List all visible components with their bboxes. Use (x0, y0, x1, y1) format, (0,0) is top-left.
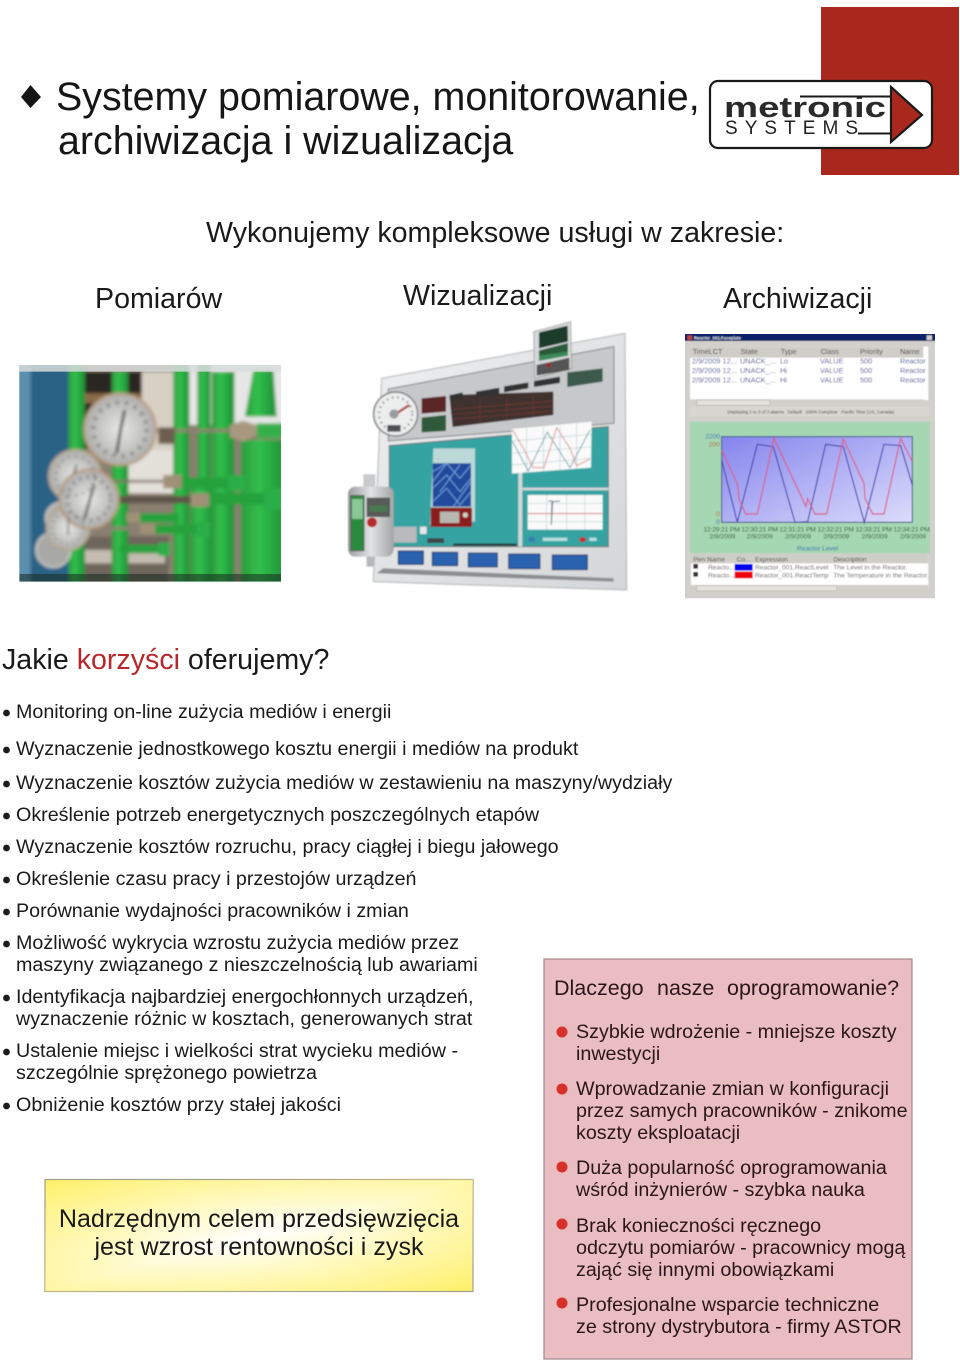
image: alarm table and trend chart window: UNACK_... (740, 357, 776, 366)
subtitle: services: Wykonujemy kompleksowe usługi w zakresie: (206, 217, 784, 249)
list: benefits: Ustalenie miejsc i wielkości strat wycieku mediów - (16, 1040, 458, 1062)
image: alarm table and trend chart window: UNACK_... (740, 375, 776, 384)
panel: why our software: inwestycji (576, 1043, 660, 1065)
list: benefits: Określenie potrzeb energetycznych poszczególnych etapów (16, 804, 540, 826)
title (56, 75, 700, 163)
image: alarm table and trend chart window: 0 (716, 519, 720, 526)
image: alarm table and trend chart window: Reactor_001.Faceplate (694, 335, 742, 340)
image: alarm table and trend chart window: TimeLCT (693, 347, 723, 356)
list: benefits: Monitoring on-line zużycia mediów i energii (16, 701, 391, 723)
photo: pressure gauges on green pipes (13, 360, 287, 587)
image: alarm table and trend chart window: Reactor_001.ReactLevel (755, 564, 829, 571)
image: alarm table and trend chart window: VALUE (820, 375, 844, 384)
panel: why our software: zająć się innymi obowiązkami (576, 1259, 834, 1281)
image: SCADA visualisation panel (348, 322, 627, 590)
image: alarm table and trend chart window: 2/9/2009 (823, 534, 850, 541)
image: alarm table and trend chart window: The Temperature in the Reactor. (833, 572, 929, 579)
image: alarm table and trend chart window: 12:29:21 PM 12:30:21 PM 12:31:21 PM 12:32:21 PM 12:33:21 PM 12:34:21 PM (703, 526, 930, 533)
callout: main goal (45, 1180, 473, 1292)
image: alarm table and trend chart window: Co... (737, 556, 751, 563)
image: alarm table and trend chart window: Reactor (900, 375, 926, 384)
image: alarm table and trend chart window: 200 (709, 442, 720, 449)
image: alarm table and trend chart window: 0 (716, 511, 720, 518)
image: alarm table and trend chart window: Reactor Level (797, 546, 839, 553)
list: benefits: Wyznaczenie jednostkowego kosztu energii i mediów na produkt (16, 738, 579, 760)
panel: why our software: Duża popularność oprogramowania (576, 1157, 887, 1179)
logo: metronic systems: metronic (724, 92, 886, 124)
panel: why our software: ze strony dystrybutora - firmy ASTOR (576, 1316, 902, 1338)
logo: metronic systems: SYSTEMS (725, 118, 858, 139)
image: alarm table and trend chart window: Type (781, 347, 797, 356)
panel: why our software: odczytu pomiarów - pracownicy mogą (576, 1237, 905, 1259)
image: alarm table and trend chart window: Reacto... (708, 572, 735, 579)
image: alarm table and trend chart window: 500 (860, 357, 872, 366)
image: alarm table and trend chart window: UNACK_... (740, 366, 776, 375)
panel: why our software: Wprowadzanie zmian w konfiguracji (576, 1078, 889, 1100)
list: benefits (3, 701, 672, 1116)
heading: Pomiarów: Pomiarów (95, 283, 222, 315)
heading: why our software: nasze (657, 976, 714, 1000)
list: benefits: Porównanie wydajności pracowników i zmian (16, 900, 409, 922)
list: benefits: Obniżenie kosztów przy stałej jakości (16, 1094, 341, 1116)
image: alarm table and trend chart window: Lo (780, 357, 788, 366)
image: alarm table and trend chart window: Hi (780, 366, 787, 375)
panel: why our software: Profesjonalne wsparcie techniczne (576, 1294, 879, 1316)
image: alarm table and trend chart window: Hi (780, 375, 787, 384)
icon: title diamond (21, 85, 41, 108)
heading: why our software: oprogramowanie? (727, 976, 899, 1000)
image: alarm table and trend chart window: Displaying 1 to 3 of 3 alarms Default 100% Complete Pacific Time (US_Canada) (727, 409, 895, 414)
logo: metronic systems (710, 7, 959, 175)
image: alarm table and trend chart window: Reactor (900, 366, 926, 375)
image: alarm table and trend chart window (680, 330, 940, 603)
image: alarm table and trend chart window: 500 (860, 366, 872, 375)
image: alarm table and trend chart window: Priority (860, 347, 883, 356)
image: alarm table and trend chart window: Class (821, 347, 839, 356)
list: benefits: wyznaczenie różnic w kosztach, generowanych strat (15, 1008, 473, 1030)
image: alarm table and trend chart window: VALUE (820, 357, 844, 366)
title: archiwizacja i wizualizacja (58, 119, 513, 163)
image: alarm table and trend chart window: 2/9/2009 (900, 534, 926, 541)
image: alarm table and trend chart window: The Level in the Reactor. (833, 564, 907, 571)
image: alarm table and trend chart window: Pen Name (693, 556, 725, 563)
image: alarm table and trend chart window: State (741, 347, 758, 356)
image: alarm table and trend chart window: 2/9/2009 (747, 534, 773, 541)
image: alarm table and trend chart window: 2/9/2009 (785, 534, 811, 541)
image: alarm table and trend chart window: Reacto... (708, 564, 735, 571)
list: benefits: maszyny związanego z nieszczelnością lub awariami (16, 954, 478, 976)
image: alarm table and trend chart window: 500 (860, 375, 872, 384)
title: Systemy pomiarowe, monitorowanie, (56, 75, 700, 119)
panel: why our software: wśród inżynierów - szybka nauka (575, 1179, 865, 1201)
callout: main goal: jest wzrost rentowności i zysk (93, 1233, 424, 1261)
list: benefits: Możliwość wykrycia wzrostu zużycia mediów przez (16, 932, 459, 954)
image: alarm table and trend chart window: Name (900, 347, 920, 356)
callout: main goal: Nadrzędnym celem przedsięwzięcia (59, 1205, 459, 1233)
list: benefits: Identyfikacja najbardziej energochłonnych urządzeń, (16, 986, 473, 1008)
image: alarm table and trend chart window: Reactor_001.ReactTemp (755, 572, 829, 579)
list: benefits: Określenie czasu pracy i przestojów urządzeń (16, 868, 416, 890)
heading: Wizualizacji: Wizualizacji (403, 280, 552, 312)
list: benefits: szczególnie sprężonego powietrza (16, 1062, 317, 1084)
image: alarm table and trend chart window: 2/9/2009 12... (692, 375, 737, 384)
heading: why our software: Dlaczego (554, 976, 644, 1000)
image: alarm table and trend chart window: VALUE (820, 366, 844, 375)
list: benefits: Wyznaczenie kosztów rozruchu, pracy ciągłej i biegu jałowego (16, 836, 559, 858)
panel: why our software: Brak konieczności ręcznego (576, 1215, 821, 1237)
list: benefits: Wyznaczenie kosztów zużycia mediów w zestawieniu na maszyny/wydziały (16, 772, 672, 794)
panel: why our software: koszty eksploatacji (576, 1122, 740, 1144)
image: alarm table and trend chart window: Reactor (900, 357, 926, 366)
image: alarm table and trend chart window: Expression (755, 556, 788, 563)
image: alarm table and trend chart window: 2/9/2009 (862, 534, 888, 541)
panel: why our software: Szybkie wdrożenie - mniejsze koszty (576, 1021, 897, 1043)
image: alarm table and trend chart window: 2200 (705, 434, 720, 441)
panel: why our software: przez samych pracowników - znikome (576, 1100, 908, 1122)
heading: Archiwizacji: Archiwizacji (723, 283, 872, 315)
image: alarm table and trend chart window: Description (833, 556, 867, 563)
image: alarm table and trend chart window: 2/9/2009 12... (692, 357, 737, 366)
heading: why our software (554, 976, 899, 1000)
image: alarm table and trend chart window: 2/9/2009 (709, 534, 736, 541)
image: alarm table and trend chart window: 2/9/2009 12... (692, 366, 737, 375)
panel: why our software (544, 959, 912, 1359)
heading: benefits: Jakie korzyści oferujemy? (2, 644, 329, 676)
